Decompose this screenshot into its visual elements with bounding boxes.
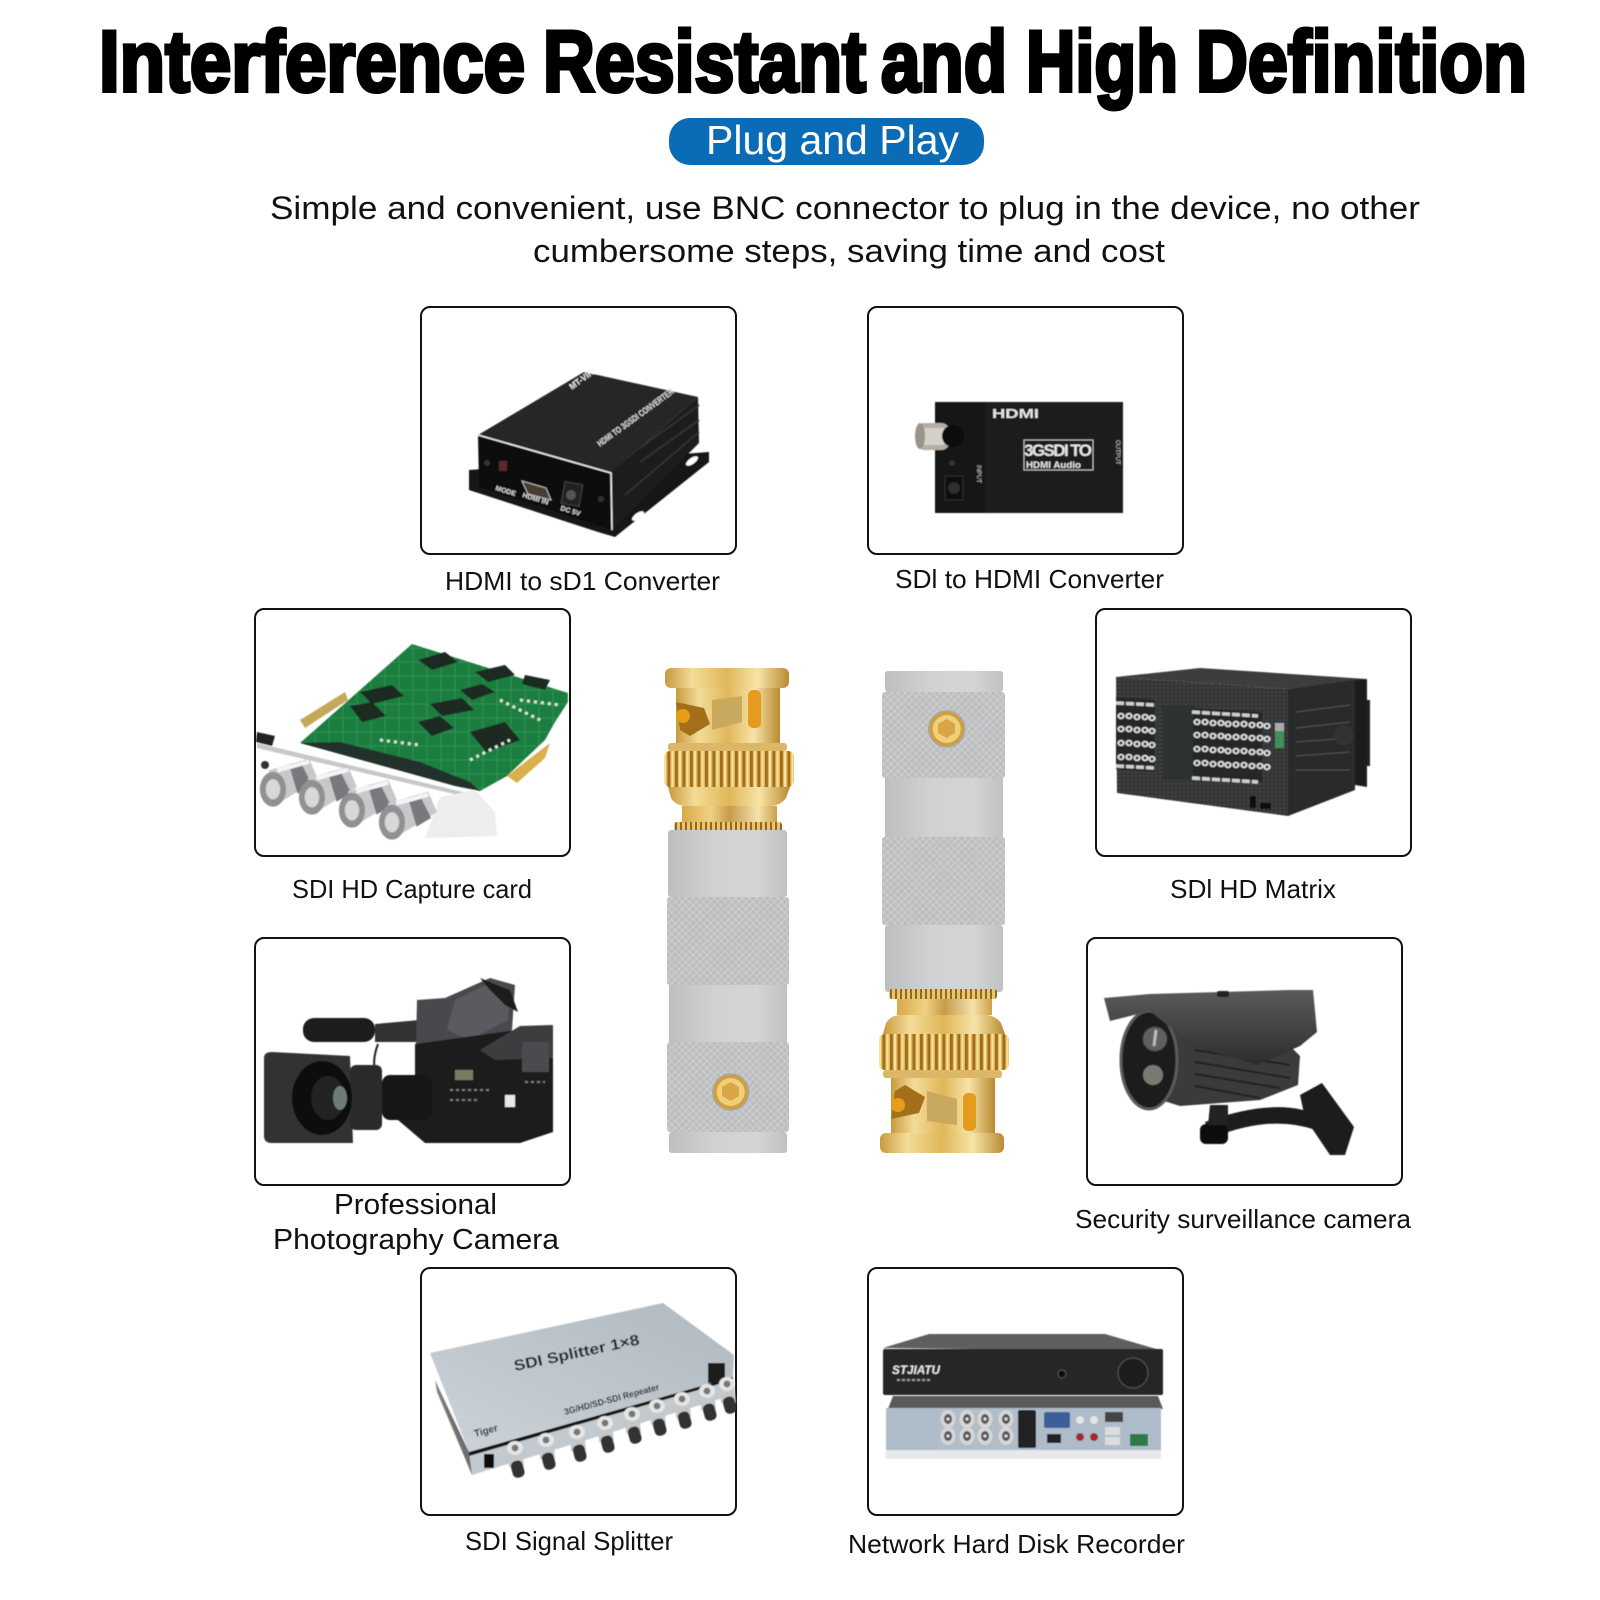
caption: Network Hard Disk Recorder <box>848 1529 1185 1559</box>
caption: SDI Signal Splitter <box>465 1526 673 1556</box>
set screw <box>929 711 965 747</box>
device: matrix chassis <box>1116 668 1370 816</box>
caption: SDI HD Capture card <box>292 874 532 904</box>
panel: HDMI to SDI converter <box>421 307 736 596</box>
description text: cumbersome steps, saving time and cost <box>533 233 1165 269</box>
silver sleeve <box>667 830 789 1153</box>
title: Resistant <box>543 14 866 110</box>
title: Definition <box>1196 14 1527 110</box>
panel: SDI to HDMI converter <box>868 307 1183 594</box>
connector: right BNC, gold head at bottom <box>879 671 1009 1153</box>
device: splitter box <box>430 1303 738 1479</box>
title: High <box>1026 14 1178 110</box>
frame <box>421 1268 736 1515</box>
frame <box>868 307 1183 554</box>
device: DVR front and rear <box>883 1334 1163 1459</box>
panel: security camera <box>1075 938 1412 1234</box>
device: black converter: INPUT <box>975 465 981 483</box>
frame <box>421 307 736 554</box>
connector: left BNC, gold head on top <box>664 668 794 1153</box>
frame <box>255 609 570 856</box>
silver sleeve <box>882 671 1005 992</box>
title <box>99 14 1527 110</box>
device: black converter: HDMI Audio <box>1026 460 1082 470</box>
caption: Photography Camera <box>273 1224 560 1256</box>
caption: Professional <box>334 1189 497 1221</box>
panel: network hard disk recorder <box>848 1268 1185 1559</box>
panel: professional camera <box>255 938 570 1256</box>
frame <box>1096 609 1411 856</box>
device: converter box: DC 5V <box>559 505 581 518</box>
caption: SDl HD Matrix <box>1170 874 1336 904</box>
frame <box>255 938 570 1185</box>
device: black converter: OUTPUT <box>1114 440 1120 465</box>
device: splitter box: SDI Splitter 1×8 <box>512 1332 641 1375</box>
device: black converter: 3GSDI TO <box>1024 441 1092 460</box>
device: converter box: HDMI IN <box>521 492 549 507</box>
device: capture card <box>256 644 568 840</box>
device: black converter <box>915 402 1123 513</box>
device: splitter box: 3G/HD/SD-SDI Repeater <box>563 1382 661 1417</box>
gold head <box>879 989 1009 1153</box>
device: splitter box: Tiger <box>473 1423 499 1440</box>
caption: SDl to HDMI Converter <box>895 564 1164 594</box>
set screw <box>713 1074 749 1110</box>
caption: HDMI to sD1 Converter <box>445 566 720 596</box>
panel: SDI HD matrix <box>1096 609 1411 904</box>
device: bullet camera <box>1104 990 1354 1155</box>
caption: Security surveillance camera <box>1075 1204 1412 1234</box>
device: converter box: MODE <box>494 485 517 498</box>
device: black converter: HDMI <box>992 406 1039 421</box>
title: and <box>881 14 1007 110</box>
gold head <box>664 668 794 832</box>
description text <box>270 190 1420 269</box>
device: video camera <box>264 978 553 1143</box>
device: converter box: HDMI TO 3GSDI CONVERTER <box>595 386 676 449</box>
frame <box>868 1268 1183 1515</box>
device: converter box <box>469 366 709 537</box>
panel: SDI signal splitter <box>421 1268 738 1556</box>
device: DVR front and rear: STJIATU <box>892 1363 940 1377</box>
caption <box>273 1189 560 1256</box>
badge: plug and play: Plug and Play <box>706 117 959 163</box>
panel: SDI capture card <box>255 609 570 904</box>
device: converter box: MT-VIKI <box>567 366 597 392</box>
description text: Simple and convenient, use BNC connector to plug in the device, no other <box>270 190 1420 226</box>
title: Interference <box>99 14 525 110</box>
frame <box>1087 938 1402 1185</box>
